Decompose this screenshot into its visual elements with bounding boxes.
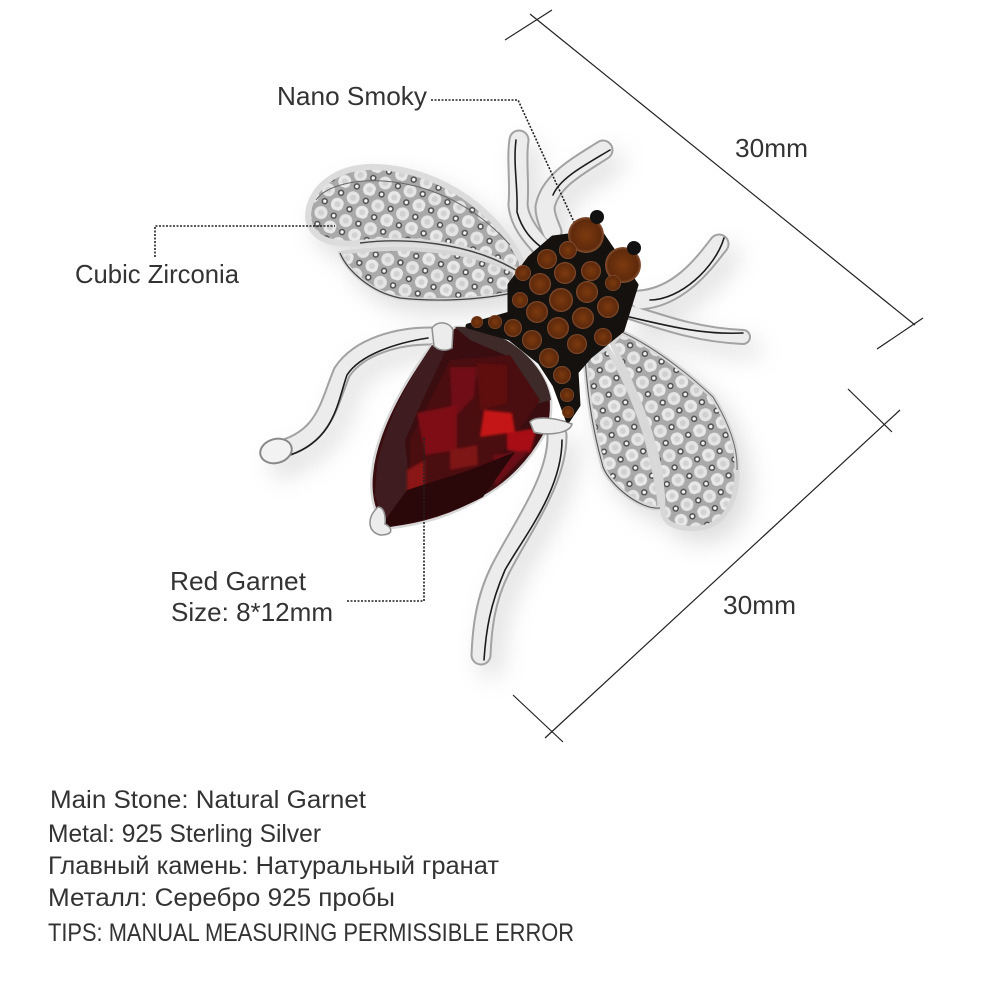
product specifications [48, 786, 574, 947]
brooch: fly [257, 140, 743, 660]
callout: Cubic Zirconia: Cubic Zirconia [75, 259, 240, 289]
eyes tips [590, 210, 641, 255]
label: top 30mm: 30mm [735, 133, 808, 163]
facet: centre [410, 355, 540, 490]
facet: top band [455, 327, 551, 405]
wing: right inner [585, 348, 660, 508]
product specifications: Главный камень: Натуральный гранат [48, 852, 500, 880]
callout: Red Garnet: Size: 8*12mm [171, 597, 333, 627]
facet: bottom dark [383, 452, 515, 527]
callout: Nano Smoky [277, 81, 574, 222]
prongs [370, 323, 572, 535]
facet: red patches [407, 363, 537, 492]
wing: right outer [612, 332, 737, 528]
dimension line: top 30mm [505, 10, 923, 349]
garnet stone [371, 327, 551, 528]
wing: lower left [340, 249, 515, 300]
smoky stones [471, 217, 641, 418]
callout: Red Garnet [170, 437, 424, 627]
callout: Red Garnet: Red Garnet [170, 566, 307, 596]
dimension line: bottom 30mm [513, 389, 900, 742]
legs, antennae and wings with soft shadow [257, 140, 743, 660]
callout: Nano Smoky: Nano Smoky [277, 81, 427, 111]
label: bottom 30mm: 30mm [723, 590, 796, 620]
legs and antennae [274, 140, 743, 660]
product specifications: TIPS: MANUAL MEASURING PERMISSIBLE ERROR [48, 919, 574, 947]
facet: left band [375, 345, 445, 523]
product specifications: Металл: Серебро 925 пробы [48, 884, 395, 912]
wing: upper left [308, 167, 522, 274]
foot blob left [257, 435, 295, 467]
callout: Cubic Zirconia [75, 226, 335, 289]
product specifications: Main Stone: Natural Garnet [50, 786, 366, 814]
product specifications: Metal: 925 Sterling Silver [48, 820, 321, 848]
body: black setting [468, 232, 636, 420]
